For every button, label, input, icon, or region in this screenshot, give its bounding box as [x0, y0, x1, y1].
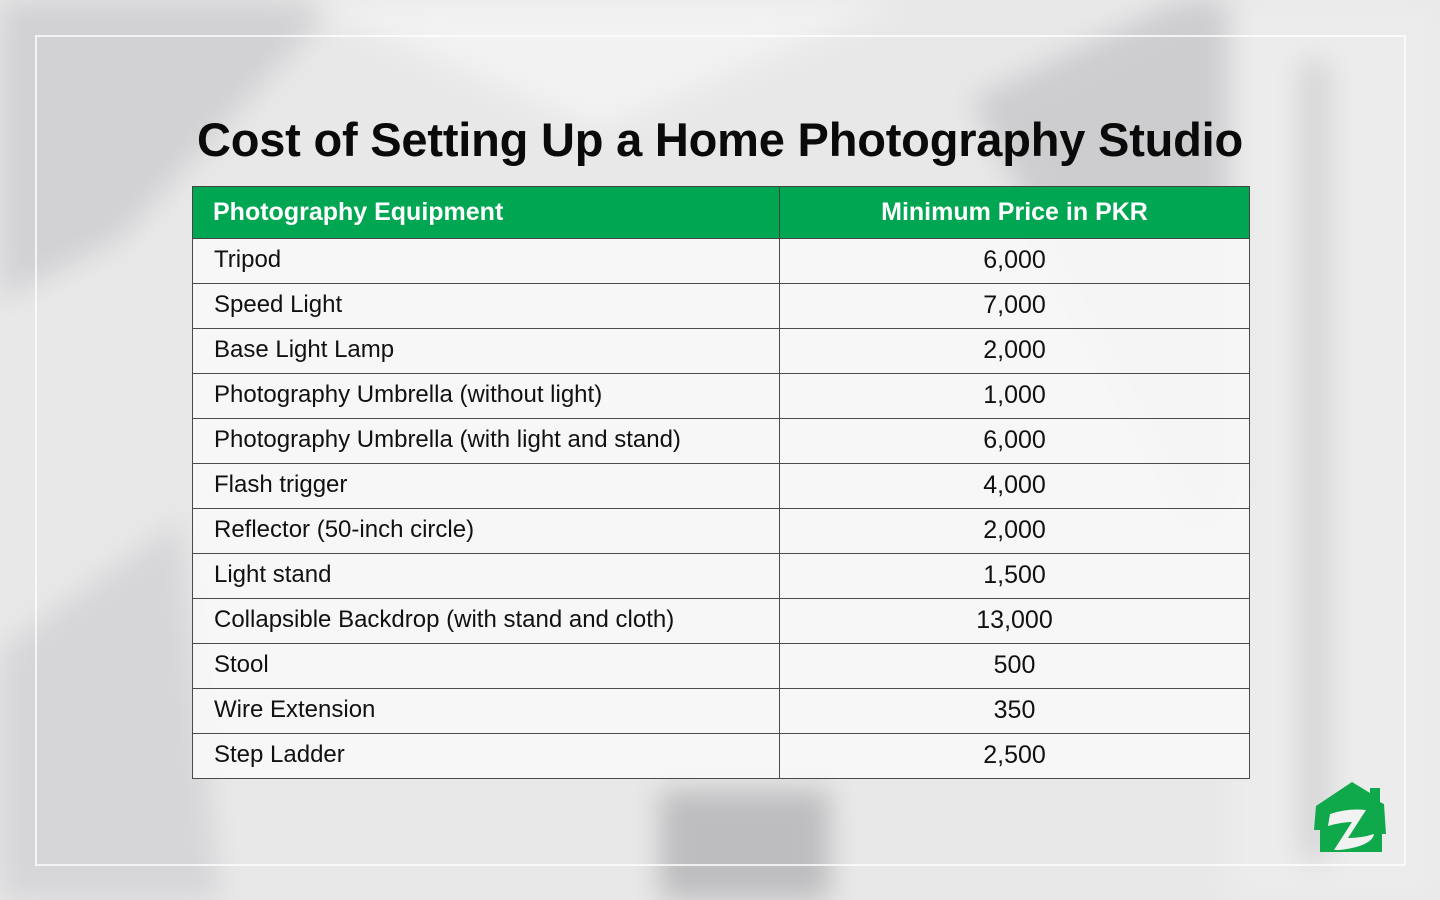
table: equipment prices: 13,000: [976, 606, 1053, 634]
table: equipment prices: Photography Equipment: [213, 198, 503, 226]
table: equipment prices: Step Ladder: [214, 741, 345, 768]
table: equipment prices: [192, 186, 1250, 779]
table: equipment prices: Base Light Lamp: [214, 336, 394, 363]
table: equipment prices: Flash trigger: [214, 471, 347, 498]
table: equipment prices: Stool: [214, 651, 269, 678]
icon: logo: [1314, 782, 1386, 852]
table: equipment prices: 500: [994, 650, 1035, 678]
table: equipment prices: 6,000: [983, 426, 1046, 454]
table: equipment prices: Tripod: [214, 246, 281, 273]
table: equipment prices: Wire Extension: [214, 696, 375, 723]
title: Cost of Setting Up a Home Photography Studio: [197, 113, 1243, 166]
table: equipment prices: 1,000: [983, 380, 1046, 408]
table: equipment prices: Reflector (50-inch circle): [214, 516, 474, 543]
table: equipment prices: Minimum Price in PKR: [881, 198, 1148, 226]
table: equipment prices: Light stand: [214, 561, 331, 588]
table: equipment prices: Photography Umbrella (without light): [214, 381, 602, 408]
table: equipment prices: Photography Umbrella (with light and stand): [214, 426, 681, 453]
table: equipment prices: 2,500: [983, 740, 1046, 768]
table: equipment prices: 350: [994, 696, 1035, 724]
table: equipment prices: 1,500: [983, 560, 1046, 588]
table: equipment prices: Collapsible Backdrop (with stand and cloth): [214, 606, 674, 633]
table: equipment prices: 4,000: [983, 470, 1046, 498]
table: equipment prices: 7,000: [983, 290, 1046, 318]
table: equipment prices: Speed Light: [214, 291, 342, 318]
table: equipment prices: 2,000: [983, 516, 1046, 544]
table: equipment prices: 2,000: [983, 336, 1046, 364]
table: equipment prices: 6,000: [983, 246, 1046, 274]
